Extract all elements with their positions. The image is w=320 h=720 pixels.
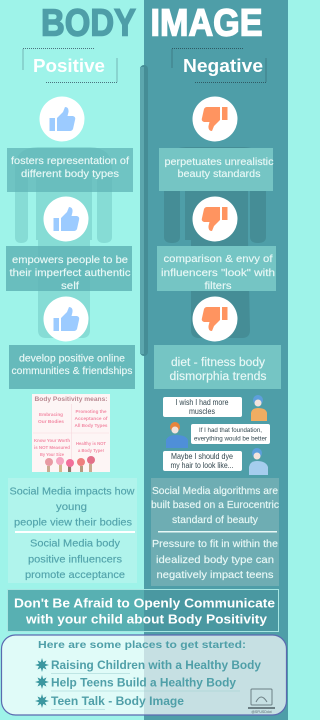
panel: positive social media: people view their bodies	[14, 516, 132, 528]
icon: thumbs up 1	[40, 96, 84, 142]
text box: comparison: influencers "look" with	[161, 267, 275, 279]
title	[41, 2, 262, 44]
callout	[7, 589, 279, 632]
heading: positive: Positive	[33, 56, 105, 76]
panel: negative social media	[151, 478, 279, 586]
text box: comparison	[157, 246, 276, 292]
panel: negative social media: negatively impact teens	[156, 569, 274, 581]
title: BODY	[41, 2, 136, 44]
panel: negative social media: built based on a Eurocentric	[151, 499, 279, 511]
text box: communities	[9, 345, 135, 389]
text box: diet	[154, 345, 281, 389]
text box: comparison: comparison & envy of	[164, 253, 273, 265]
links: Teen Talk - Body Image	[51, 696, 184, 708]
bubble: foundation: everything would be better	[194, 436, 268, 442]
bubble: muscles	[163, 397, 242, 417]
callout: with your child about Body Positivity	[25, 612, 267, 626]
panel: negative social media: Pressure to fit in within the	[152, 538, 278, 550]
icon: thumbs up 3	[44, 296, 88, 342]
right background	[144, 0, 288, 720]
panel: body positivity means	[32, 394, 110, 472]
bubble: foundation: If I had that foundation,	[199, 427, 262, 434]
person 1	[251, 395, 267, 421]
panel: resources: Here are some places to get started:	[38, 639, 246, 651]
hearts	[45, 456, 95, 472]
text box: empowers: their imperfect authentic	[10, 267, 130, 279]
panel: positive social media: Social Media impacts how	[10, 486, 135, 498]
panel: body positivity means: All Body Types	[74, 423, 108, 428]
panel: negative social media: Social Media algorithms are	[152, 485, 278, 497]
text box: diet: diet - fitness body	[171, 357, 265, 369]
left background	[0, 0, 144, 720]
panel: body positivity means: Our Bodies	[38, 419, 64, 424]
logo: @SFUSDdot	[251, 710, 272, 714]
panel: body positivity means: Promoting the	[76, 409, 107, 414]
panel: body positivity means: Know Your Worth	[34, 438, 70, 443]
text box: perpetuates	[159, 148, 274, 191]
panel: negative social media: idealized body type can	[156, 554, 274, 566]
panel: body positivity means: is NOT Measured	[34, 445, 70, 450]
person 3	[249, 448, 268, 475]
bubble: dye hair: my hair to look like...	[170, 461, 234, 470]
panel: positive social media: promote acceptance	[25, 569, 125, 581]
panel: body positivity means: By Your Size	[40, 452, 64, 457]
person 2	[166, 422, 188, 448]
text box: perpetuates: perpetuates unrealistic	[164, 156, 274, 168]
panel: positive social media: Social Media body	[30, 538, 121, 550]
logo	[248, 689, 275, 714]
icon: thumbs down 1	[192, 96, 238, 142]
body silhouette	[15, 65, 266, 356]
bubble: dye hair: Maybe I should dye	[171, 452, 233, 461]
star bullets	[35, 658, 49, 708]
links	[51, 660, 262, 710]
bubble: foundation	[191, 424, 270, 444]
panel: positive social media: young	[56, 501, 87, 513]
icon: thumbs down 2	[192, 196, 238, 242]
text box: communities: communities & friendships	[12, 365, 132, 377]
text box: comparison: filters	[204, 280, 232, 292]
panel: body positivity means: Acceptance of	[74, 416, 108, 421]
text box: fosters representation	[7, 148, 133, 192]
bubble: dye hair	[163, 451, 242, 471]
panel: body positivity means: Healthy is NOT	[76, 441, 106, 446]
heading: negative: Negative	[183, 56, 263, 76]
panel: body positivity means: Embracing	[39, 412, 63, 417]
links: Raising Children with a Healthy Body	[51, 660, 262, 672]
text box: diet: dismorphia trends	[170, 371, 267, 383]
bubble: muscles: I wish I had more	[176, 398, 229, 407]
panel: negative social media: standard of beauty	[172, 514, 259, 526]
speech bubbles	[163, 395, 270, 475]
panel: positive social media	[8, 478, 137, 583]
panel: resources	[2, 635, 286, 715]
title: IMAGE	[150, 2, 262, 44]
heading: positive	[23, 48, 117, 82]
panel: body positivity means: Body Positivity means:	[34, 397, 108, 403]
text box: empowers: self	[61, 280, 79, 292]
panel: body positivity means: a Body Type!	[78, 448, 104, 453]
text box: empowers: empowers people to be	[12, 254, 128, 266]
icon: thumbs down 3	[192, 296, 238, 342]
text box: fosters representation: different body types	[21, 168, 119, 180]
callout: Don't Be Afraid to Openly Communicate	[14, 596, 275, 610]
text box: fosters representation: fosters representation of	[11, 155, 129, 167]
text box: communities: develop positive online	[19, 352, 125, 364]
links: Help Teens Build a Healthy Body	[51, 678, 237, 690]
text box: empowers	[6, 246, 132, 292]
icon: thumbs up 2	[44, 196, 88, 242]
bubble: muscles: muscles	[189, 407, 215, 416]
text box: perpetuates: beauty standards	[178, 168, 260, 180]
heading: negative	[172, 48, 266, 82]
panel: positive social media: positive influencers	[28, 554, 122, 566]
